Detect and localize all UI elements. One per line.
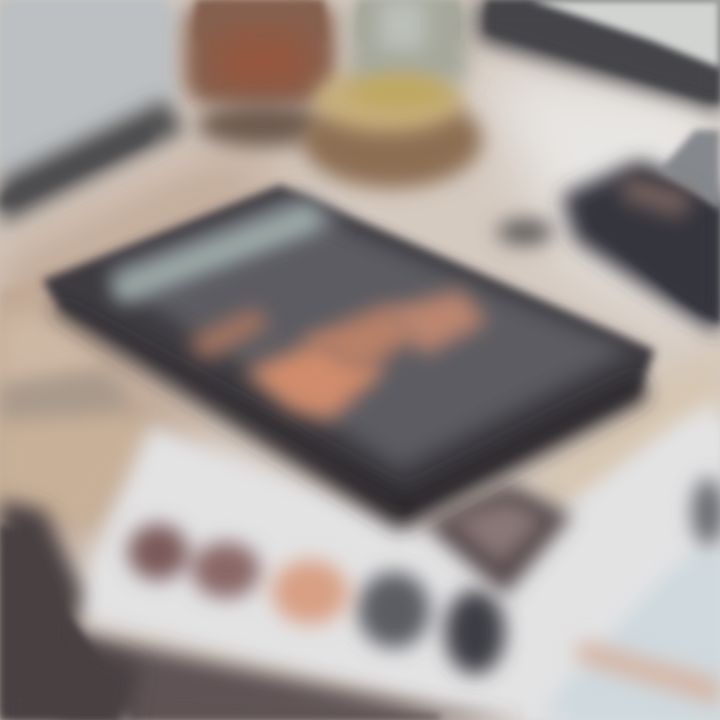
calculator screen <box>108 195 345 305</box>
dark calculator body <box>42 185 655 530</box>
desk plank lines <box>0 310 150 530</box>
card beside the tablet <box>425 485 572 595</box>
white paper at bottom <box>80 400 720 720</box>
device: top left <box>0 0 185 225</box>
small dark object <box>497 219 553 245</box>
glass of amber drink <box>185 0 335 147</box>
orange keys <box>188 290 488 420</box>
colour swatches <box>128 524 505 674</box>
glass of yellow drink <box>350 0 468 110</box>
right chart paper <box>540 478 720 720</box>
device: top right <box>478 0 720 115</box>
wooden coaster <box>302 68 482 188</box>
dark object at right <box>562 130 720 335</box>
bottom left dark corner <box>0 500 140 720</box>
dark strip below paper <box>60 630 520 720</box>
